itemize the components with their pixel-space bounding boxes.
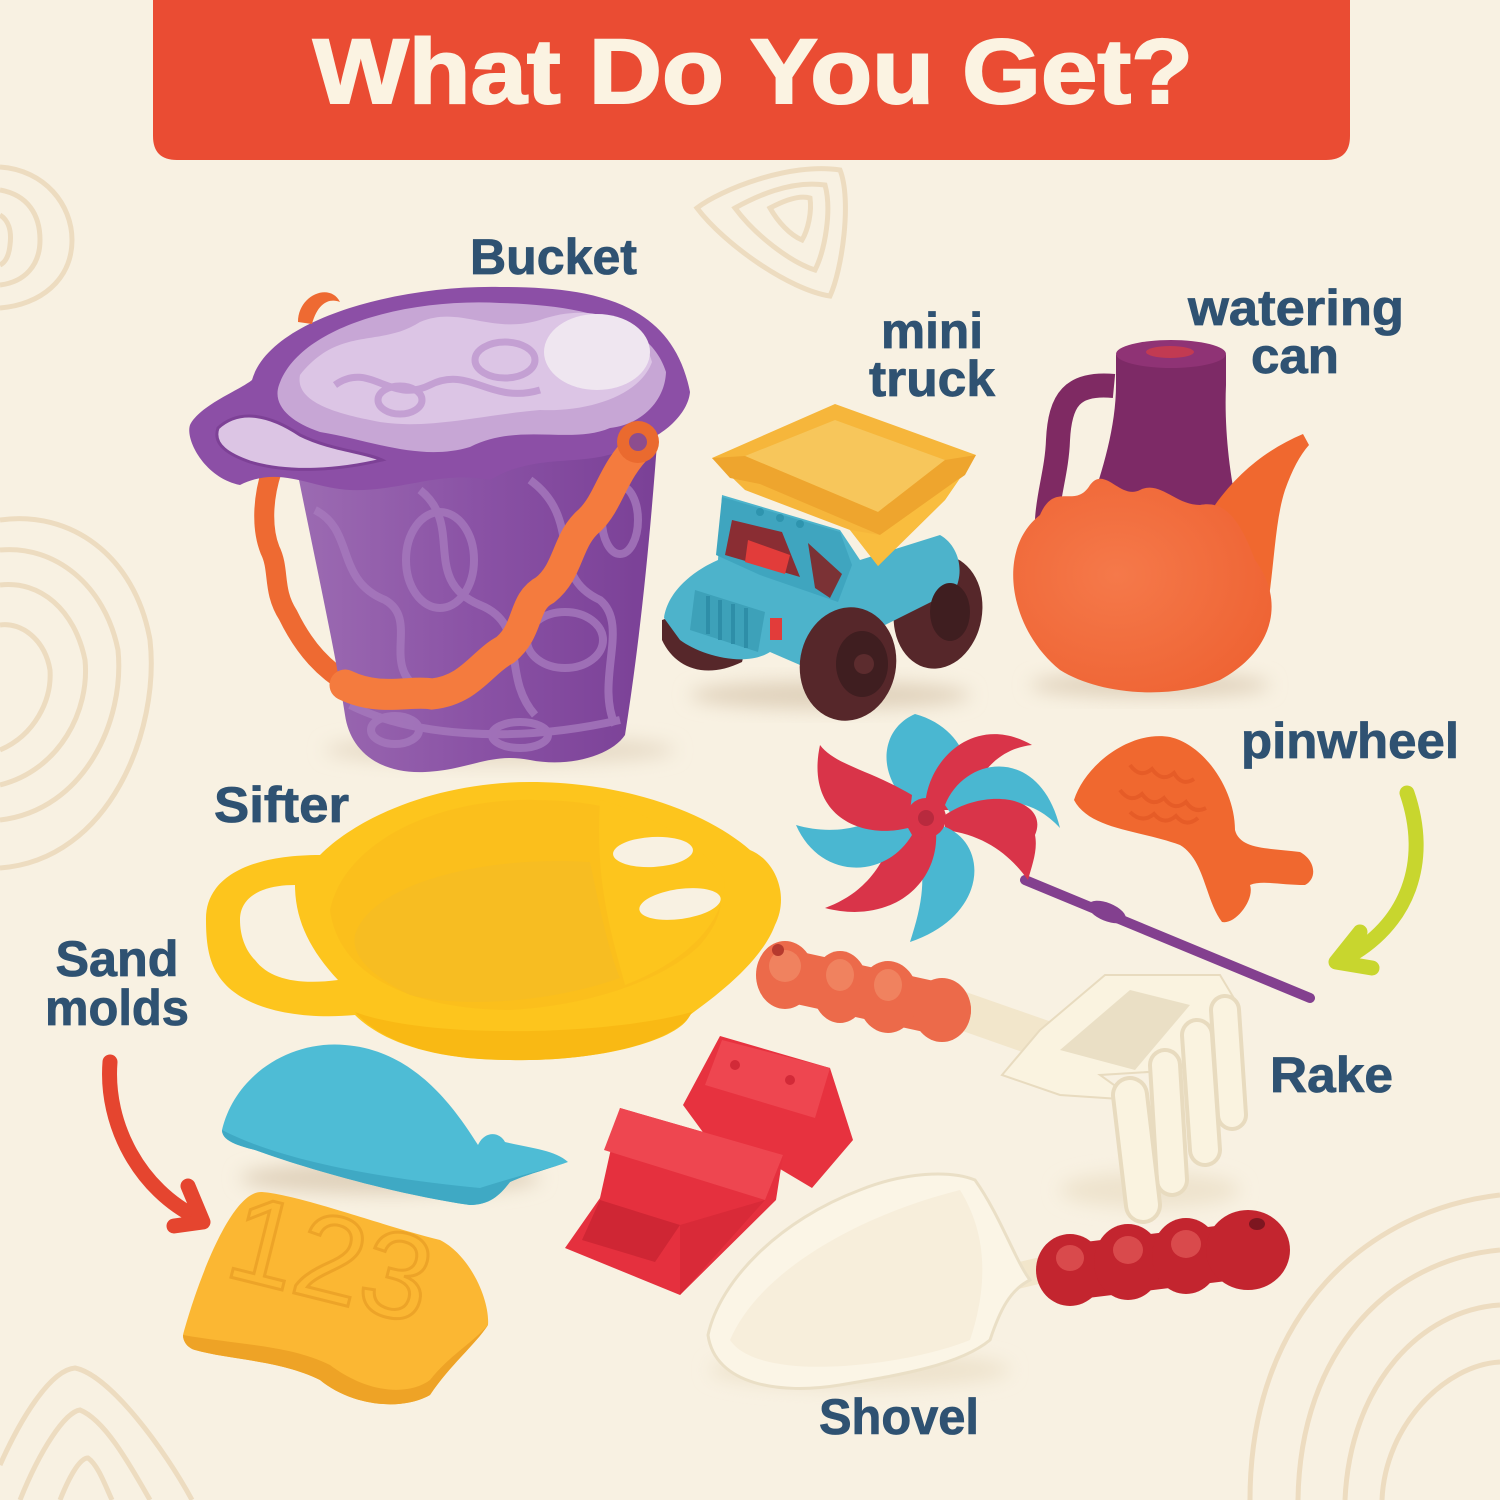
title: What Do You Get? — [313, 21, 1193, 123]
handle pivot left — [298, 292, 340, 324]
shovel scoop — [708, 1174, 1030, 1388]
truck cab — [664, 495, 960, 665]
icon: purple bucket — [189, 287, 690, 772]
shovel shaft — [1000, 1268, 1050, 1280]
label: Sifter: Sifter — [214, 777, 349, 833]
icon: fish sand mold — [1074, 736, 1313, 922]
label: watering can: can — [1251, 328, 1339, 384]
truck front wheel — [791, 600, 905, 728]
can handle — [1047, 385, 1114, 520]
label: mini truck: mini — [881, 303, 983, 359]
label: watering can: watering — [1187, 280, 1404, 336]
rake head — [1002, 975, 1235, 1100]
truck bed — [712, 404, 976, 566]
icon: robot sand molds — [565, 1036, 853, 1295]
arrow: red curved arrow — [110, 1062, 203, 1226]
can spout — [1215, 434, 1309, 640]
handle behind bucket — [264, 470, 350, 685]
can neck — [1085, 342, 1240, 520]
title banner — [153, 0, 1350, 160]
icon: yellow sifter — [206, 782, 781, 1060]
icon: mini truck — [662, 404, 991, 728]
rake shaft — [960, 1010, 1060, 1045]
label: Sand molds — [45, 931, 189, 1036]
rake handle beads — [756, 941, 971, 1042]
icon: shovel — [708, 1174, 1290, 1388]
icon: pinwheel — [796, 714, 1310, 998]
bucket handle — [345, 445, 640, 694]
bucket rim — [189, 287, 690, 490]
label: mini truck: truck — [869, 351, 995, 407]
icon: watering can — [1013, 340, 1309, 697]
label: watering can — [1187, 280, 1404, 384]
label: Bucket: Bucket — [470, 229, 637, 285]
bucket left grip — [217, 416, 382, 469]
label: Sand molds: molds — [45, 980, 189, 1036]
truck wheels — [662, 618, 743, 671]
icon: whale sand mold — [222, 1045, 568, 1205]
embossed numerals: 123 — [216, 1168, 446, 1349]
label: Shovel: Shovel — [819, 1389, 979, 1445]
label: Sand molds: Sand — [56, 931, 178, 987]
label: Rake: Rake — [1270, 1047, 1393, 1103]
bucket body — [296, 430, 658, 772]
bucket pattern — [315, 480, 638, 748]
icon: number sand mold — [183, 1168, 488, 1404]
pinwheel stick — [1025, 880, 1310, 998]
label: mini truck — [869, 303, 995, 407]
shovel handle — [1036, 1210, 1290, 1306]
can body — [1013, 479, 1272, 692]
arrow: lime curved arrow — [1336, 793, 1416, 968]
sifter holes — [612, 835, 723, 925]
label: pinwheel: pinwheel — [1241, 713, 1459, 769]
icon: rake — [756, 941, 1240, 1208]
